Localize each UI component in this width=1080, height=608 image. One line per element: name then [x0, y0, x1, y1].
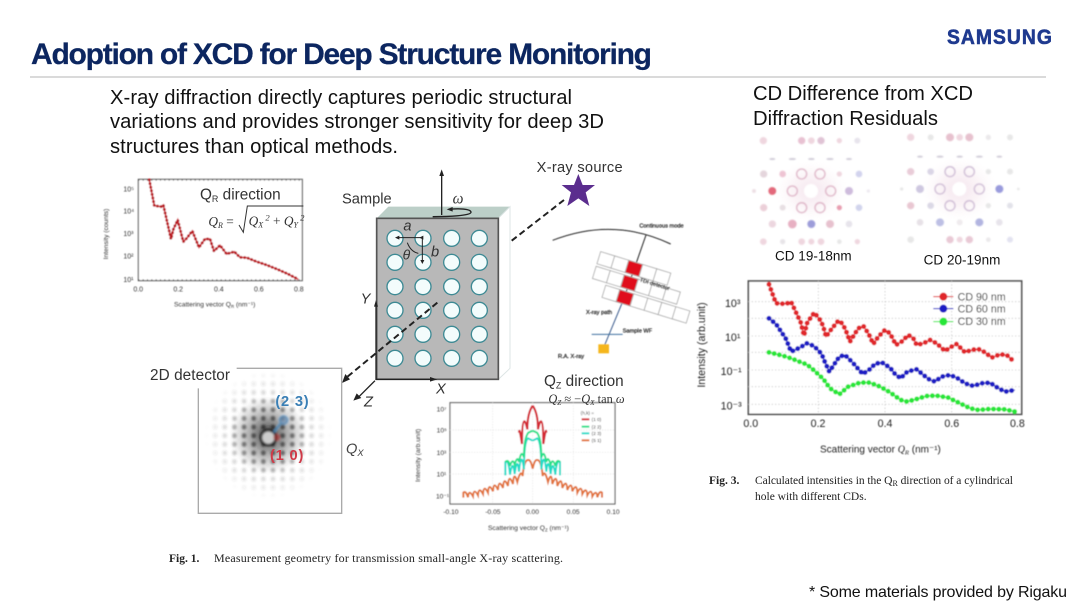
arrow: omega rotation: ω — [453, 190, 464, 207]
label: QR direction: Q — [200, 186, 212, 203]
label: CD 20-19nm: CD 20-19nm — [924, 252, 1000, 267]
formula: QR: = — [223, 214, 234, 229]
axis: X — [376, 377, 447, 397]
axis: Y — [361, 291, 378, 380]
formula: QR: R — [217, 221, 223, 230]
chart: intensity by CD: 0.0 — [743, 418, 758, 430]
formula: QZ: ω — [616, 392, 625, 406]
label: QR direction: R — [212, 194, 219, 204]
chart: QR direction intensity: 0.8 — [294, 286, 304, 293]
label: X-ray source: X-ray source — [537, 160, 623, 176]
chart: intensity by CD: 10⁻¹ — [721, 366, 742, 378]
label: (1 0): (1 0) — [270, 448, 303, 464]
chart: QZ direction intensity: Scattering vector Q — [488, 525, 545, 532]
arrow: incident beam — [512, 200, 564, 241]
chart: intensity by CD: 0.8 — [1010, 418, 1025, 430]
footnote: * Some materials provided by Rigaku — [809, 584, 1067, 601]
series: CD 30 nm — [769, 352, 1015, 412]
chart: intensity by CD: Scattering vector Q — [820, 444, 905, 455]
chart: QR direction intensity: R — [231, 304, 234, 309]
chart: QR direction intensity: 10¹ — [123, 277, 134, 284]
chart: intensity by CD: 0.4 — [878, 418, 893, 430]
chart: QZ direction intensity: 0.00 — [526, 509, 539, 516]
chart: QR direction intensity: (nm⁻¹) — [234, 302, 255, 309]
chart: QR direction intensity: 10³ — [123, 231, 134, 238]
caption: Fig. 1: Fig. 1. — [169, 553, 199, 565]
chart: QR direction intensity: 10² — [123, 254, 134, 261]
chart: QR direction intensity: 0.6 — [254, 286, 264, 293]
diagram: TDI detector schematic: Continuous mode — [639, 223, 684, 229]
heading: CD difference — [753, 83, 973, 130]
chart: QZ direction intensity: Z — [545, 527, 548, 532]
formula: QR: Q — [284, 213, 294, 228]
legend: (2 2) — [592, 424, 602, 429]
legend — [933, 291, 1006, 328]
legend: CD 90 nm — [958, 291, 1006, 303]
text block: intro — [110, 87, 604, 158]
axis: Y: Y — [361, 291, 372, 307]
arrow: transmitted beam — [342, 303, 437, 383]
label: sample: Sample — [342, 191, 392, 207]
series: CD 90 nm — [769, 284, 1013, 361]
legend: (h,k) = — [581, 410, 594, 415]
diagram: TDI detector schematic: Sample WF — [623, 328, 653, 334]
chart: QR direction intensity: 0.0 — [133, 286, 143, 293]
formula: QZ: tan — [595, 392, 616, 406]
label: Z axis: Z — [363, 395, 374, 411]
legend: (2 3) — [592, 431, 602, 436]
label: Z axis — [353, 381, 375, 411]
legend — [581, 410, 602, 443]
diagram: TDI detector schematic — [553, 223, 699, 360]
chart: QZ direction intensity — [415, 373, 625, 532]
label: Qx: X — [356, 448, 364, 458]
caption: Fig. 3: hole with different CDs. — [755, 491, 867, 503]
chart: QR direction intensity: 10⁴ — [123, 208, 134, 215]
chart: QZ direction intensity: 10⁻¹ — [436, 494, 450, 501]
heading: CD difference: Diffraction Residuals — [753, 108, 938, 130]
label: CD 19-18nm: CD 19-18nm — [775, 248, 852, 263]
arrow: omega rotation — [433, 169, 471, 217]
diagram: TDI detector schematic: TDI detector — [639, 278, 670, 292]
chart: QZ direction intensity: (nm⁻¹) — [548, 525, 569, 532]
caption: Fig. 3 — [709, 475, 1013, 503]
chart: intensity by CD: R — [904, 449, 909, 456]
chart: CD difference map 20-19nm — [900, 133, 1020, 267]
text block: intro: variations and provides stronger sensitivity for deep 3D — [110, 111, 604, 133]
label: 2D detector: 2D detector — [150, 367, 230, 384]
lattice vectors a, b, theta: b — [431, 245, 439, 261]
chart: intensity by CD: 0.6 — [944, 418, 959, 430]
lattice vectors a, b, theta: a — [403, 219, 411, 235]
caption: Fig. 3: Fig. 3. — [709, 475, 739, 487]
chart: QZ direction intensity: Intensity (arb.unit) — [415, 429, 422, 482]
title: Adoption of XCD for Deep Structure Monitoring — [31, 38, 652, 71]
detector frame — [198, 368, 342, 513]
label: QZ direction: direction — [561, 373, 624, 390]
chart: intensity by CD: Intensity (arb.unit) — [696, 302, 708, 388]
formula: QR: Q — [249, 213, 258, 228]
formula: QR: 2 — [298, 213, 305, 223]
legend: CD 60 nm — [958, 303, 1006, 315]
chart: intensity by CD: 10⁻³ — [721, 400, 742, 412]
label: QR direction: direction — [218, 186, 281, 203]
formula: QZ: ≈ − — [561, 392, 581, 406]
caption: Fig. 1: Measurement geometry for transmission small-angle X-ray scattering. — [214, 551, 563, 565]
formula: QZ: X — [589, 398, 595, 407]
logo: Samsung: SAMSUNG — [947, 26, 1052, 49]
caption: Fig. 3: direction of a cylindrical — [898, 475, 1013, 487]
formula: QR — [208, 206, 305, 232]
chart: QZ direction intensity: -0.10 — [443, 509, 459, 516]
chart: QR direction intensity: 0.2 — [173, 286, 183, 293]
chart: QZ direction intensity: 10⁵ — [437, 428, 447, 435]
formula: QZ: Q — [581, 392, 590, 406]
formula: QZ: Q — [548, 392, 557, 406]
lattice vectors a, b, theta: θ — [403, 246, 411, 262]
chart: QZ direction intensity: 10⁷ — [437, 406, 447, 413]
legend: (1 0) — [592, 417, 602, 422]
legend: (5 1) — [592, 438, 602, 443]
chart: intensity by CD: 0.2 — [811, 418, 826, 430]
legend: CD 30 nm — [958, 316, 1006, 328]
axis: X: X — [435, 381, 447, 397]
chart: intensity by CD: 10³ — [725, 298, 741, 310]
chart: QZ direction intensity: 10¹ — [437, 472, 447, 479]
caption: Fig. 3: R — [892, 479, 898, 488]
chart: QR direction intensity: Intensity (counts) — [103, 209, 110, 259]
diagram: TDI detector schematic: X-ray path — [586, 310, 612, 316]
chart: QZ direction intensity: 0.05 — [567, 509, 580, 516]
chart: QZ direction intensity: 10³ — [437, 450, 447, 457]
chart: QZ direction intensity: -0.05 — [485, 509, 501, 516]
chart: intensity by CD: 10¹ — [725, 332, 741, 344]
diagram: TDI detector schematic: R.A. X-ray — [558, 354, 584, 360]
diagram: sample with X-ray geometry — [342, 160, 699, 397]
formula: QR: X — [257, 220, 264, 229]
chart: QR direction intensity — [103, 179, 305, 309]
chart: intensity by CD — [696, 281, 1025, 456]
label: QZ direction: Q — [544, 373, 556, 390]
label: (2 3): (2 3) — [275, 394, 309, 410]
lattice vectors a, b, theta — [395, 219, 439, 264]
formula: QR: 2 — [263, 213, 270, 223]
chart: QR direction intensity: 0.4 — [214, 286, 224, 293]
chart panel: 2D detector pattern — [150, 367, 375, 513]
formula: QR: Q — [208, 214, 218, 229]
label: Qx: Q — [346, 441, 357, 457]
chart: QZ direction intensity: 0.10 — [607, 509, 620, 516]
label: QZ direction: Z — [556, 381, 562, 391]
chart: QR direction intensity: 10⁵ — [123, 186, 134, 193]
chart: intensity by CD: (nm⁻¹) — [909, 444, 941, 455]
heading: CD difference: CD Difference from XCD — [753, 83, 973, 105]
text block: intro: structures than optical methods. — [110, 136, 398, 158]
chart: QR direction intensity: Scattering vector Q — [174, 302, 231, 309]
sample block — [377, 207, 510, 379]
text block: intro: X-ray diffraction directly captures periodic structural — [110, 87, 572, 109]
series: CD 60 nm — [769, 318, 1015, 392]
diffraction spots — [212, 381, 324, 490]
formula: QR: Y — [294, 220, 300, 229]
formula: QZ: Z — [557, 398, 562, 407]
icon: X-ray source star — [562, 174, 595, 206]
formula: QR: + — [270, 213, 284, 228]
chart: CD difference map 19-18nm — [752, 137, 870, 263]
caption: Fig. 3: Calculated intensities in the Q — [755, 475, 892, 487]
